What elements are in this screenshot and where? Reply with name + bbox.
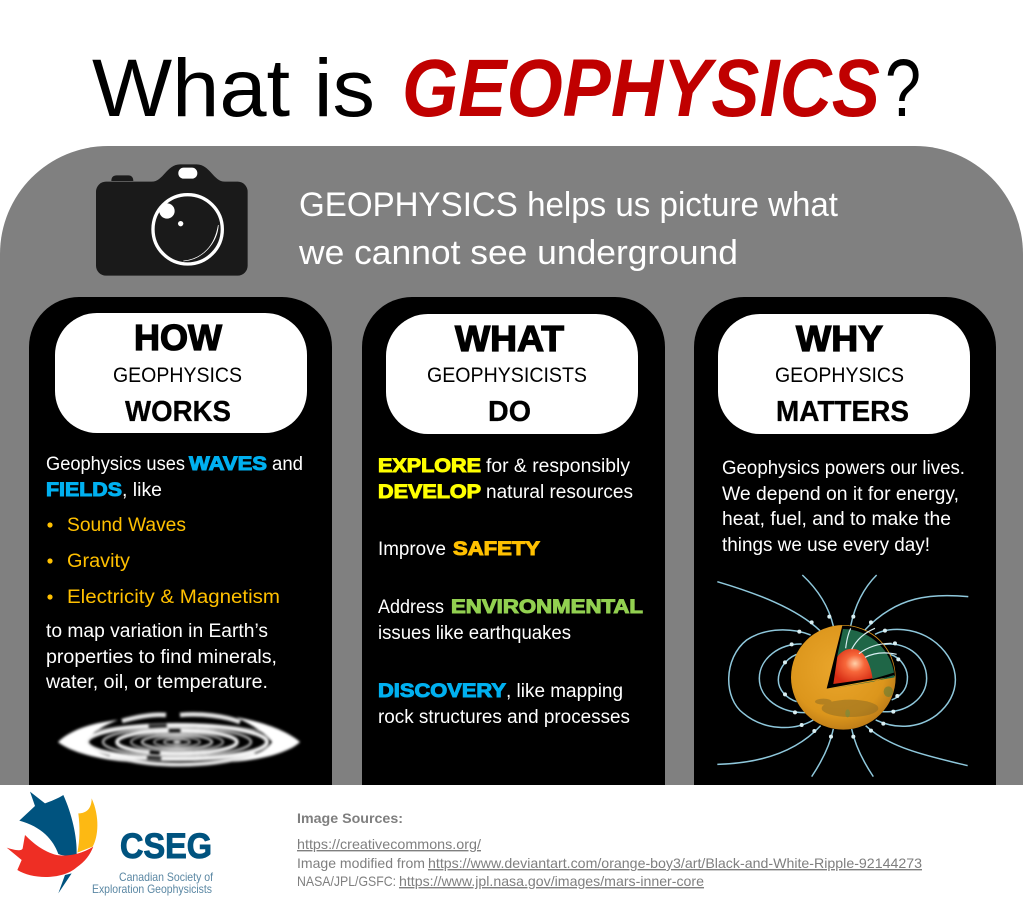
text: discovery: rock structures and processes bbox=[378, 707, 630, 728]
core bbox=[833, 649, 873, 684]
text: safety: Improve bbox=[378, 539, 446, 560]
header: how: GEOPHYSICS bbox=[113, 364, 242, 387]
surface mottling bbox=[815, 686, 893, 717]
text: discovery: DISCOVERY bbox=[378, 680, 506, 702]
logo: CSEG bbox=[7, 792, 214, 896]
image sources: Image Sources: bbox=[297, 810, 403, 826]
image: ripple bbox=[58, 714, 300, 765]
icon: camera bbox=[96, 164, 248, 276]
intro text: we cannot see underground bbox=[298, 234, 738, 272]
text: why it matters: things we use every day! bbox=[722, 535, 930, 556]
text: why it matters: We depend on it for energy, bbox=[722, 484, 959, 505]
text: environmental bbox=[378, 596, 643, 644]
text: explore and develop: DEVELOP bbox=[378, 481, 481, 503]
list: wave types: Gravity bbox=[67, 551, 131, 572]
header: why bbox=[718, 314, 970, 434]
text: waves and fields: FIELDS bbox=[46, 479, 122, 501]
image sources: https://creativecommons.org/ bbox=[297, 836, 481, 852]
text: safety bbox=[378, 538, 540, 560]
text: environmental: ENVIRONMENTAL bbox=[451, 596, 643, 618]
panel: grey background bbox=[0, 146, 1023, 785]
header: what: WHAT bbox=[455, 318, 564, 359]
planet sphere bbox=[791, 625, 896, 730]
image sources: NASA/JPL/GSFC: bbox=[297, 873, 396, 889]
header: how bbox=[55, 313, 307, 433]
text: discovery: , like mapping bbox=[506, 681, 623, 702]
intro text bbox=[298, 186, 839, 272]
text: why it matters bbox=[722, 458, 965, 556]
text: why it matters: heat, fuel, and to make the bbox=[722, 509, 951, 530]
text: waves and fields: WAVES bbox=[189, 453, 267, 475]
title: GEOPHYSICS bbox=[402, 43, 880, 134]
title: What is bbox=[92, 43, 375, 134]
logo: CSEG: Exploration Geophysicists bbox=[92, 882, 212, 896]
header: what bbox=[386, 314, 638, 434]
text: explore and develop: for & responsibly bbox=[486, 456, 631, 477]
header: why: MATTERS bbox=[776, 396, 909, 428]
text: map variation bbox=[45, 621, 277, 693]
panel: what geophysicists do bbox=[362, 297, 665, 785]
text: explore and develop: EXPLORE bbox=[378, 455, 481, 477]
footer band bbox=[0, 785, 1023, 908]
logo wordmark: CSEG bbox=[120, 827, 212, 866]
list: wave types bbox=[47, 515, 280, 608]
list: wave types: Electricity & Magnetism bbox=[67, 587, 280, 608]
header: how: WORKS bbox=[125, 396, 231, 428]
intro text: GEOPHYSICS helps us picture what bbox=[299, 186, 839, 224]
title bbox=[92, 43, 921, 134]
header: why: WHY bbox=[796, 318, 883, 359]
text: map variation: water, oil, or temperature. bbox=[45, 672, 268, 693]
text: waves and fields: Geophysics uses bbox=[46, 454, 185, 475]
text: discovery bbox=[378, 680, 630, 728]
text: environmental: Address bbox=[378, 597, 444, 618]
image: planet magnetic field bbox=[717, 575, 968, 777]
text: waves and fields: , like bbox=[122, 480, 162, 501]
text: waves and fields bbox=[46, 453, 303, 501]
panel: how geophysics works bbox=[29, 297, 332, 785]
image sources: Image modified from bbox=[297, 855, 425, 871]
logo: CSEG: Canadian Society of bbox=[119, 870, 214, 884]
text: map variation: to map variation in Earth’s bbox=[46, 621, 268, 642]
header: what: GEOPHYSICISTS bbox=[427, 364, 587, 387]
image sources: https://www.deviantart.com/orange-boy3/art/Black-and-White-Ripple-92144273 bbox=[428, 855, 922, 871]
logo mark bbox=[7, 792, 97, 893]
header: why: GEOPHYSICS bbox=[775, 364, 904, 387]
title: ? bbox=[885, 43, 921, 134]
text: environmental: issues like earthquakes bbox=[378, 623, 571, 644]
arrowheads bbox=[783, 615, 900, 739]
text: why it matters: Geophysics powers our lives. bbox=[722, 458, 965, 479]
field lines bbox=[717, 575, 968, 777]
text: explore and develop bbox=[378, 455, 633, 503]
panel: why geophysics matters bbox=[694, 297, 996, 785]
cutaway wedge bbox=[827, 626, 895, 689]
list: wave types: Sound Waves bbox=[67, 515, 186, 536]
inner field lines bbox=[846, 628, 897, 657]
image sources bbox=[297, 810, 922, 889]
text: map variation: properties to find minerals, bbox=[46, 647, 277, 668]
text: explore and develop: natural resources bbox=[486, 482, 633, 503]
header: what: DO bbox=[488, 396, 531, 428]
header: how: HOW bbox=[134, 317, 222, 358]
text: safety: SAFETY bbox=[453, 538, 540, 560]
image sources: https://www.jpl.nasa.gov/images/mars-inner-core bbox=[399, 873, 704, 889]
text: waves and fields: and bbox=[272, 454, 303, 475]
